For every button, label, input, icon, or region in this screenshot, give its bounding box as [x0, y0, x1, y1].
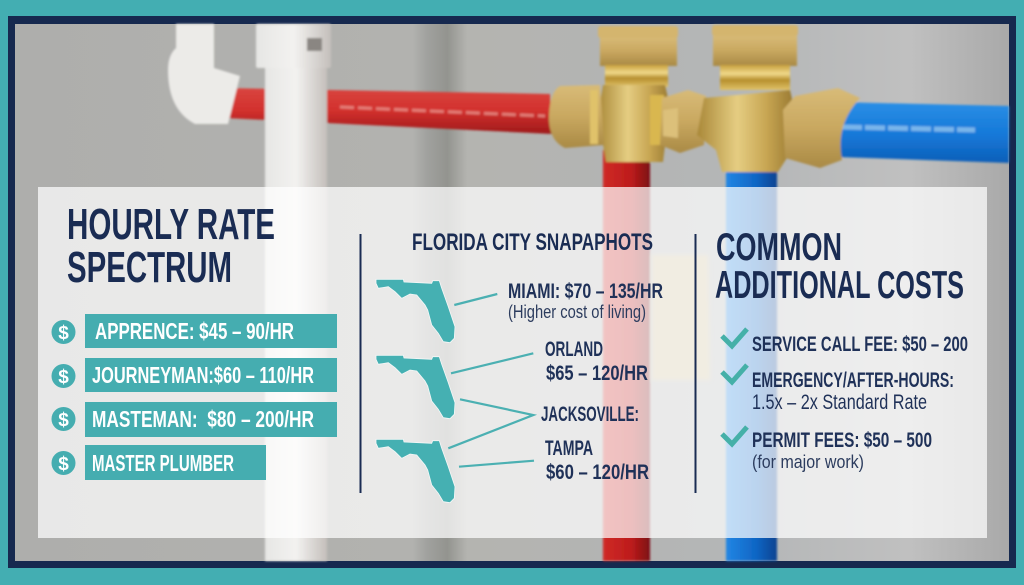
rate row: apprentice: $: [58, 323, 69, 344]
rate row: master plumber: [52, 445, 266, 480]
right brass fitting: [713, 35, 797, 66]
red horizontal pipe: [225, 88, 552, 134]
cost item: permit fees: [722, 427, 932, 472]
rate row: journeyman: JOURNEYMAN:$60 – 110/HR: [92, 362, 314, 388]
cost item: permit fees: PERMIT FEES: $50 – 500: [752, 429, 932, 452]
divider right: [694, 234, 696, 493]
city: miami: MIAMI: $70 – 135/HR: [508, 280, 663, 303]
rate row: masteman: $: [58, 410, 69, 431]
icon: florida map middle: [376, 355, 455, 419]
icon: florida map bottom: [376, 439, 455, 503]
rate row: masteman: MASTEMAN: $80 – 200/HR: [92, 406, 314, 432]
cost item: service call fee: [722, 329, 968, 356]
translucent white panel: [38, 187, 987, 538]
section: common additional costs: [715, 226, 968, 472]
blue horizontal pipe: [832, 102, 1009, 163]
leader lines: jacksonville: [448, 399, 533, 448]
divider left: [360, 234, 362, 493]
rate row: master plumber: MASTER PLUMBER: [92, 450, 234, 476]
heading: common additional costs: COMMON: [716, 226, 842, 269]
lower blue vertical pipe: [726, 165, 777, 561]
rate row: masteman: [52, 402, 337, 437]
icon: florida map top: [376, 279, 455, 343]
cost item: emergency: [722, 365, 954, 414]
city: orlando: ORLAND: [545, 338, 603, 361]
city: orlando: [545, 338, 648, 385]
heading: hourly rate spectrum: [67, 200, 275, 292]
rate row: apprentice: APPRENCE: $45 – 90/HR: [95, 318, 294, 344]
city: miami: (Higher cost of living): [508, 302, 646, 322]
leader line: orlando: [451, 353, 533, 373]
rate row: apprentice: [52, 314, 337, 348]
city: tampa: $60 – 120/HR: [546, 461, 649, 484]
white elbow fitting: [168, 24, 240, 124]
rate row: master plumber: $: [58, 454, 69, 475]
heading: hourly rate spectrum: SPECTRUM: [67, 243, 232, 292]
city: tampa: TAMPA: [545, 437, 593, 460]
leader line: tampa: [459, 461, 534, 467]
city: tampa: [545, 437, 649, 484]
ghost coupling behind panel: [652, 255, 710, 380]
heading: florida city snapaphots: FLORIDA CITY SNAPAPHOTS: [412, 229, 653, 256]
heading: hourly rate spectrum: HOURLY RATE: [67, 200, 275, 249]
cost item: emergency: 1.5x – 2x Standard Rate: [752, 391, 927, 414]
city: orlando: $65 – 120/HR: [546, 362, 648, 385]
white vertical pipe: [265, 66, 327, 561]
leader line: miami: [454, 294, 497, 305]
lower red vertical pipe: [603, 150, 650, 561]
center brass nut: [650, 95, 664, 145]
section: hourly rate spectrum: [52, 200, 337, 480]
cost item: permit fees: (for major work): [752, 452, 864, 472]
city: miami: [508, 280, 663, 322]
heading: common additional costs: [715, 226, 964, 307]
section: florida city snapshots: [376, 229, 663, 503]
left brass fitting: [600, 36, 677, 66]
rate row: journeyman: [52, 358, 337, 392]
city: jacksonville: JACKSOVILLE:: [541, 403, 639, 426]
rate row: journeyman: $: [58, 367, 69, 388]
